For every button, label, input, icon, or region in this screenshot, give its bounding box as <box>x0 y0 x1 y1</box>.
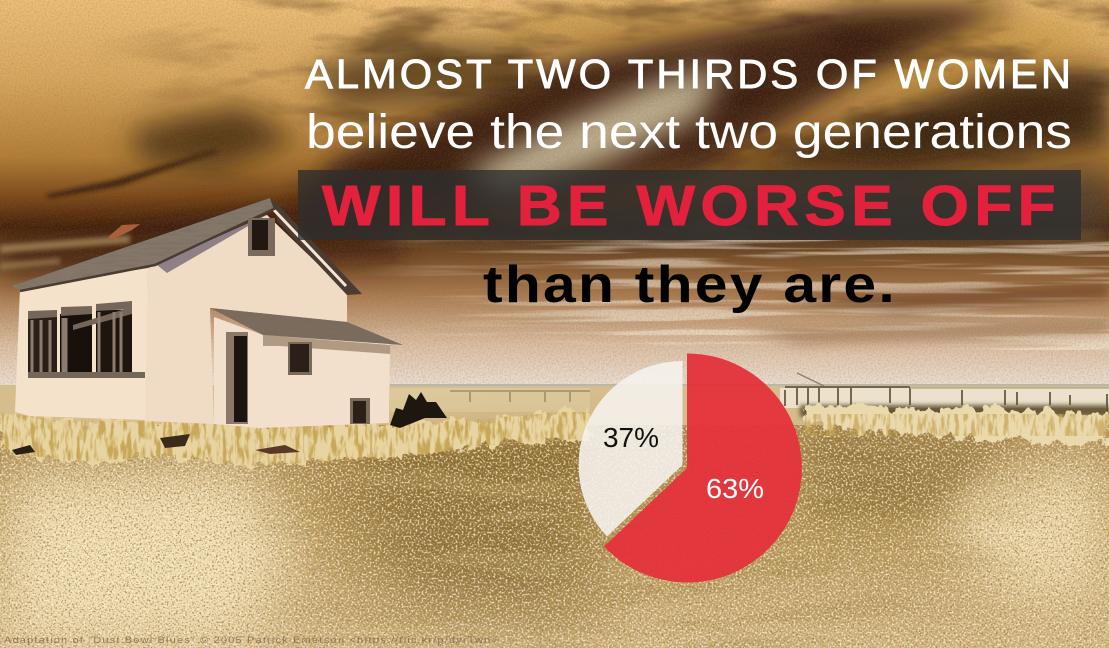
headline <box>298 51 1081 314</box>
attribution credit: Adaptation of "Dust Bowl Blues" © 2005 Patrick Emerson <https://flic.kr/p/dvrTwn> <box>4 635 499 646</box>
background: dry grass band <box>0 392 1109 466</box>
house: roof rake <box>270 198 362 295</box>
house: rake trim <box>274 210 346 286</box>
house: main roof <box>12 198 274 291</box>
house: doorway <box>226 332 248 424</box>
house: gable wall <box>145 215 347 424</box>
slice: 37% <box>579 361 682 536</box>
headline line 4: than they are. <box>483 256 897 314</box>
background: stormy sky <box>0 0 1109 392</box>
label: 63%: 63% <box>706 473 764 504</box>
headline line 2: believe the next two generations <box>306 106 1072 159</box>
headline line 3 highlighted: WILL BE WORSE OFF <box>322 174 1061 238</box>
headline line 1: ALMOST TWO THIRDS OF WOMEN <box>305 51 1074 97</box>
house: eave line <box>20 208 276 291</box>
house: low hatch <box>350 398 370 424</box>
house: lean-to wall <box>214 317 390 428</box>
highlight band <box>298 170 1081 240</box>
house: lean-to roof <box>210 308 403 345</box>
background: plain with distant fence <box>0 373 1109 430</box>
house: lean-to window <box>288 342 312 375</box>
house: gable vent <box>248 218 275 256</box>
pie chart <box>579 353 802 582</box>
house: gable shadow <box>157 214 268 273</box>
house: side wall <box>15 268 148 420</box>
background: dirt ground <box>0 425 1109 648</box>
abandoned house <box>0 190 405 428</box>
house: chimney stub <box>108 224 140 240</box>
label: 37%: 37% <box>603 422 659 453</box>
house: lean-to shadow <box>263 335 390 354</box>
slice: 63% <box>604 353 802 582</box>
house: left windows <box>28 301 145 378</box>
